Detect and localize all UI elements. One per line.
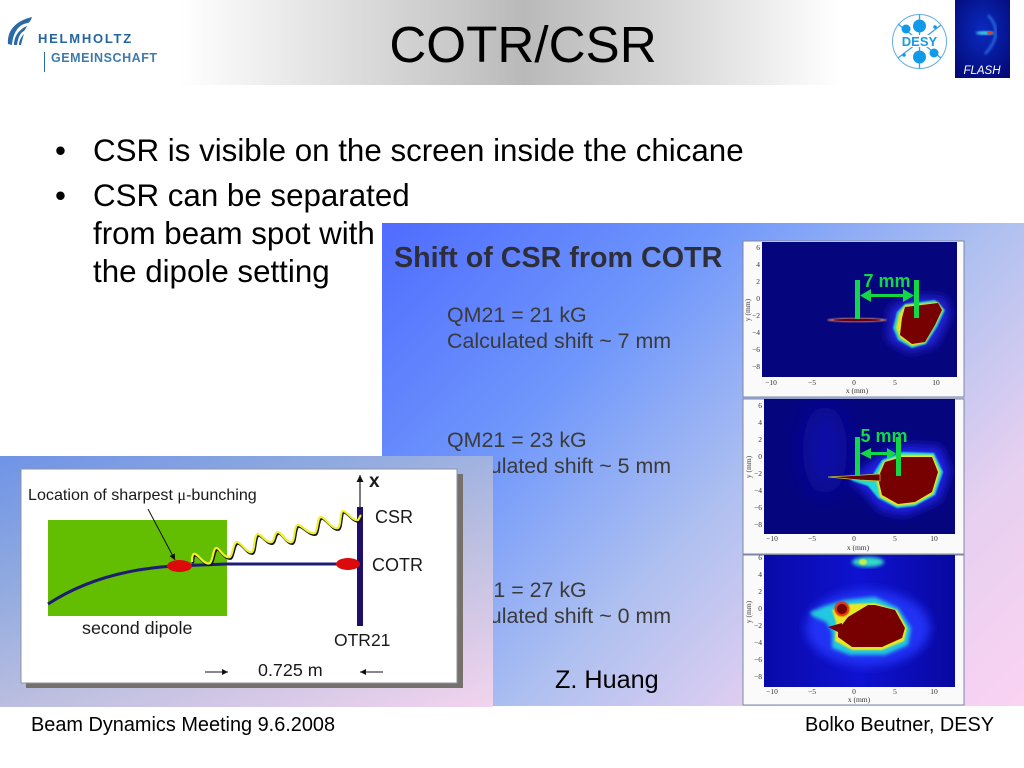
y axis labels: −2 [752, 311, 760, 320]
y axis labels: −2 [754, 469, 762, 478]
schematic card shadow [26, 474, 463, 688]
plot: 5 mm: y (mm) [744, 455, 753, 478]
text: QM21 = 27 kG: Calculated shift ~ 0 mm [447, 604, 671, 628]
y axis labels: −4 [752, 328, 760, 337]
y axis labels: 0 [758, 604, 762, 613]
y axis labels: 4 [756, 260, 760, 269]
plot: 0 mm: y (mm) [744, 600, 753, 623]
icon: Helmholtz wing [8, 17, 32, 45]
bullet 2 text: from beam spot with [93, 216, 375, 251]
text: QM21 = 27 kG [447, 578, 671, 628]
x axis labels [766, 534, 938, 552]
annotation: 5 mm [855, 426, 908, 476]
x axis labels: −10 [766, 687, 778, 696]
heatmaps [742, 240, 964, 706]
beam spot: bunching [167, 560, 192, 572]
footer left: Beam Dynamics Meeting 9.6.2008 [31, 714, 335, 736]
y axis labels: 6 [756, 243, 760, 252]
plot: 7 mm [743, 241, 964, 397]
labels: OTR21 [334, 630, 390, 650]
logo divider [44, 52, 45, 72]
x axis labels [766, 687, 938, 704]
labels: 0.725 m [258, 660, 323, 680]
x axis labels: 0 [852, 378, 856, 387]
y axis labels: 4 [758, 418, 762, 427]
text: QM21 = 21 kG [447, 303, 671, 353]
y axis labels: −8 [752, 362, 760, 371]
pointer arrow [148, 509, 175, 560]
y axis labels: 0 [756, 294, 760, 303]
text: QM21 = 23 kG [447, 428, 671, 478]
logo: DESY [892, 14, 947, 69]
credit: Z. Huang: Z. Huang [555, 666, 659, 694]
y axis labels [754, 553, 762, 681]
logo: FLASH: FLASH [963, 65, 1001, 77]
header gradient band [180, 0, 840, 85]
labels: second dipole [82, 618, 192, 638]
bullet 1: • [55, 133, 66, 168]
y axis labels: −8 [754, 672, 762, 681]
bullet 2 text [93, 178, 410, 289]
y axis labels: −4 [754, 486, 762, 495]
beam spot: COTR [336, 558, 360, 570]
title: COTR/CSR [389, 16, 657, 73]
annotation: 7 mm [855, 271, 919, 319]
y axis labels: −8 [754, 520, 762, 529]
plot: 0 mm [743, 553, 964, 705]
y axis labels [754, 401, 762, 529]
logo text: Gemeinschaft: GEMEINSCHAFT [51, 51, 158, 65]
panel heading: Shift of CSR from COTR [394, 242, 722, 274]
y axis labels: −2 [754, 621, 762, 630]
y axis labels: 6 [758, 401, 762, 410]
text: QM21 = 21 kG: QM21 = 21 kG [447, 303, 587, 327]
y axis labels: 2 [756, 277, 760, 286]
x axis labels: x (mm) [847, 543, 870, 552]
CSR wave [192, 511, 362, 565]
panel: CSR schematic [0, 456, 493, 707]
plot: 5 mm [743, 399, 964, 554]
x axis labels: 0 [852, 534, 856, 543]
annotation: 7 mm: 7 mm [863, 271, 911, 291]
x axis arrow [359, 475, 361, 507]
logo: DESY: DESY [902, 34, 938, 49]
bullet 2 text: the dipole setting [93, 254, 330, 289]
plot: 7 mm: y (mm) [743, 298, 752, 321]
x axis labels: 5 [893, 378, 897, 387]
x axis labels: 5 [893, 687, 897, 696]
labels: x [369, 471, 380, 492]
labels: Location of sharpest μ-bunching [28, 486, 257, 504]
text: QM21 = 23 kG: QM21 = 23 kG [447, 428, 587, 452]
schematic card [21, 469, 457, 683]
logo text: Helmholtz: HELMHOLTZ [38, 31, 133, 46]
beam path [48, 564, 345, 604]
OTR21 screen [357, 507, 363, 626]
second dipole block [48, 520, 227, 616]
x axis labels: 0 [852, 687, 856, 696]
y axis labels: −6 [754, 655, 762, 664]
x axis labels [765, 378, 940, 395]
labels: COTR [372, 555, 423, 575]
x axis labels: −5 [808, 378, 816, 387]
text: QM21 = 27 kG: QM21 = 27 kG [447, 578, 587, 602]
y axis labels: 6 [758, 553, 762, 562]
schematic diagram [20, 468, 463, 688]
labels [28, 471, 423, 680]
text: QM21 = 21 kG: Calculated shift ~ 7 mm [447, 329, 671, 353]
y axis labels: −6 [754, 503, 762, 512]
y axis labels: 2 [758, 587, 762, 596]
annotation: 5 mm: 5 mm [860, 426, 908, 446]
y axis labels: 2 [758, 435, 762, 444]
bullet 2: • [55, 178, 66, 213]
x axis labels: 5 [893, 534, 897, 543]
x axis labels: 10 [930, 534, 938, 543]
x axis labels: −10 [765, 378, 777, 387]
bullet 1 text: CSR is visible on the screen inside the chicane [93, 133, 744, 168]
x axis labels: −10 [766, 534, 778, 543]
x axis labels: x (mm) [848, 695, 871, 704]
panel: shift of CSR from COTR [382, 223, 1024, 706]
y axis labels: 4 [758, 570, 762, 579]
x axis labels: x (mm) [846, 386, 869, 395]
y axis labels: 0 [758, 452, 762, 461]
y axis labels [752, 243, 760, 371]
x axis labels: 10 [930, 687, 938, 696]
text: QM21 = 23 kG: Calculated shift ~ 5 mm [447, 454, 671, 478]
x axis labels: 10 [932, 378, 940, 387]
footer right: Bolko Beutner, DESY [805, 714, 994, 736]
logo: Helmholtz Gemeinschaft [8, 17, 158, 72]
y axis labels: −4 [754, 638, 762, 647]
bullet list [55, 133, 744, 289]
bullet 2 text: CSR can be separated [93, 178, 410, 213]
x axis labels: −5 [808, 534, 816, 543]
logo: FLASH [955, 0, 1010, 78]
labels: CSR [375, 507, 413, 527]
dimension arrows [205, 671, 228, 673]
x axis labels: −5 [808, 687, 816, 696]
y axis labels: −6 [752, 345, 760, 354]
